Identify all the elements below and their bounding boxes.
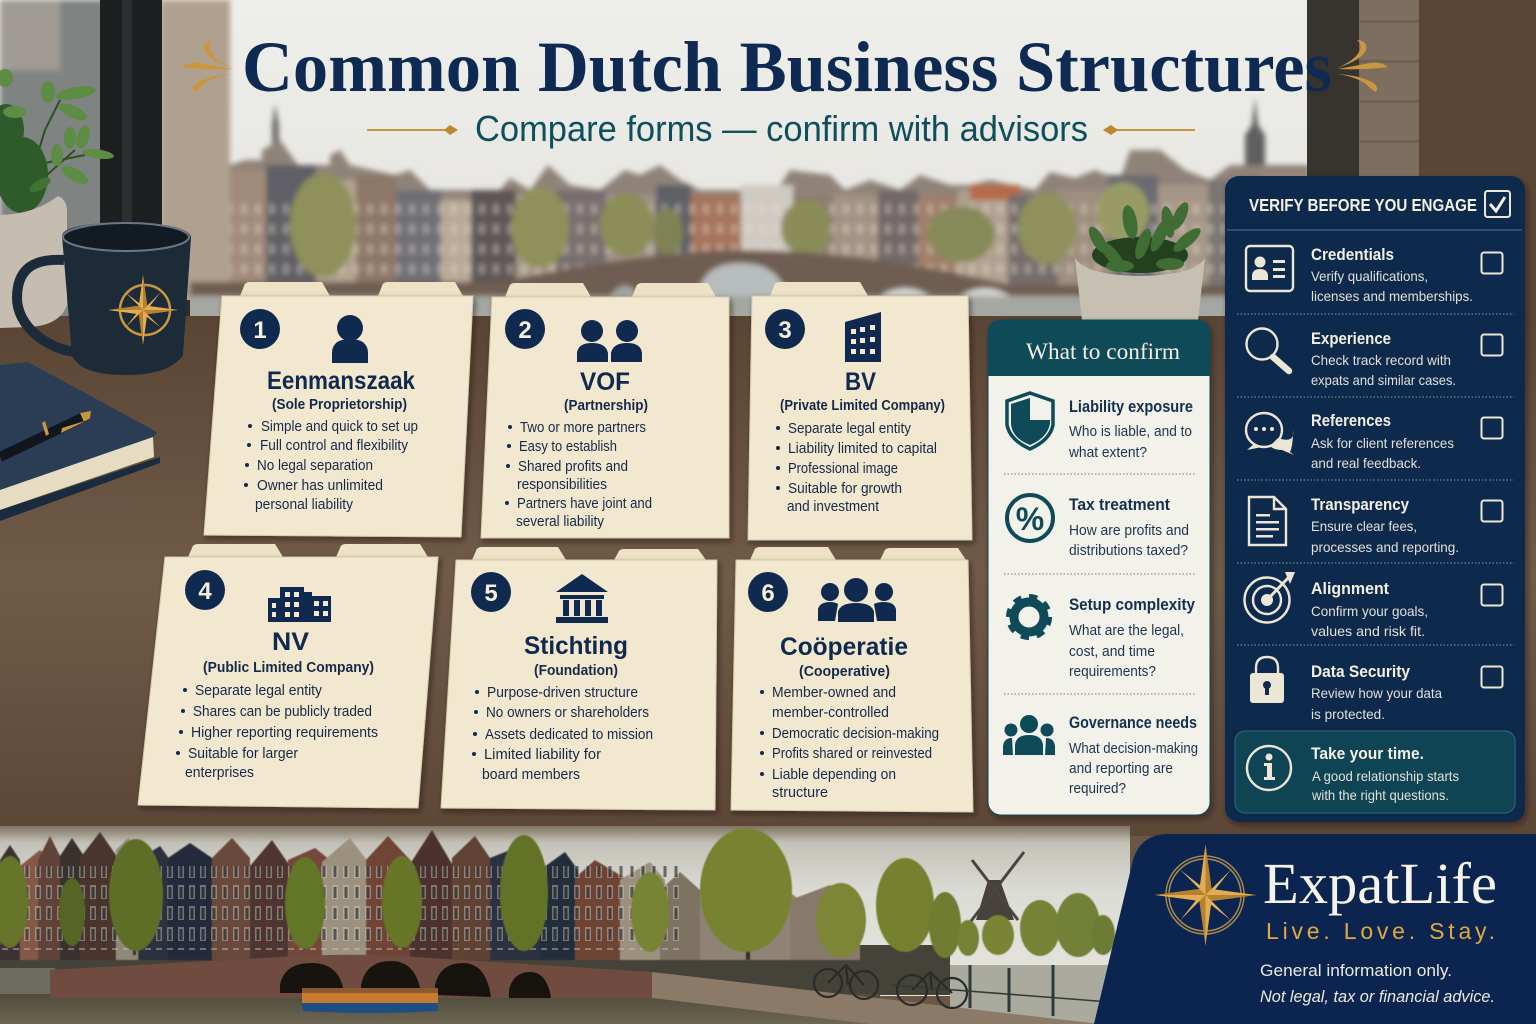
- card 2: VOF: (Partnership): [564, 398, 648, 414]
- railing: [890, 965, 1110, 1016]
- number badge: 5: [484, 580, 498, 607]
- number badge: 1: [253, 317, 267, 344]
- bicycles: [814, 965, 967, 1008]
- number badge: [471, 572, 511, 612]
- card 2: VOF: [481, 283, 729, 538]
- card 4: NV: [138, 544, 438, 808]
- card 2: VOF: Partners have joint and: [517, 496, 652, 512]
- card 4: NV: enterprises: [185, 765, 254, 781]
- item: credentials: Credentials: [1311, 245, 1394, 264]
- windmill: [968, 852, 1024, 925]
- item: tax treatment: distributions taxed?: [1069, 543, 1188, 559]
- number badge: [765, 309, 805, 349]
- card 6: Coöperatie: Profits shared or reinvested: [772, 746, 932, 762]
- card 2: VOF: Easy to establish: [519, 439, 617, 455]
- panel: what to confirm: [988, 320, 1210, 815]
- card 2: VOF: Shared profits and: [518, 459, 628, 475]
- card 6: Coöperatie: [731, 547, 973, 812]
- item: alignment: [1244, 572, 1502, 639]
- card 6: Coöperatie: Member-owned and: [772, 685, 896, 701]
- item: alignment: Alignment: [1311, 579, 1389, 598]
- number badge: [185, 570, 225, 610]
- photo: plant in pot: [0, 69, 114, 328]
- card 2: VOF: responsibilities: [517, 477, 607, 493]
- panel heading with check box: VERIFY BEFORE YOU ENGAGE: [1249, 195, 1477, 215]
- icon: compass rose: [1155, 844, 1256, 946]
- number badge: 4: [198, 578, 212, 605]
- item: transparency: Ensure clear fees,: [1311, 518, 1417, 534]
- background: wooden table: [0, 316, 1536, 836]
- card 1: Eenmanszaak: personal liability: [255, 497, 354, 513]
- item: setup complexity: Setup complexity: [1069, 596, 1196, 614]
- item: governance needs: required?: [1069, 781, 1126, 797]
- icon: institution: [556, 574, 608, 623]
- card 6: Coöperatie: Democratic decision-making: [772, 726, 939, 742]
- card 3: BV: Suitable for growth: [788, 481, 902, 497]
- icon: person: [332, 315, 368, 363]
- background: bottom canal scene: [0, 826, 1130, 1024]
- card 6: Coöperatie: member-controlled: [772, 705, 889, 721]
- card 6: Coöperatie: (Cooperative): [799, 664, 890, 680]
- card 3: BV: Professional image: [788, 461, 898, 477]
- card 3: BV: and investment: [787, 499, 879, 515]
- card 4: NV: NV: [272, 628, 309, 656]
- boat: [301, 988, 438, 1013]
- item: data security: [1250, 657, 1502, 722]
- card 1: Eenmanszaak: Full control and flexibility: [260, 438, 409, 454]
- number badge: 6: [761, 580, 775, 607]
- callout: take your time: A good relationship starts: [1312, 768, 1459, 784]
- card 4: NV: Shares can be publicly traded: [193, 704, 372, 720]
- card 4: NV: (Public Limited Company): [203, 660, 374, 676]
- icon: two people: [577, 320, 642, 362]
- item: references: References: [1311, 411, 1391, 430]
- card 1: Eenmanszaak: (Sole Proprietorship): [272, 397, 407, 413]
- number badge: 3: [778, 317, 792, 344]
- card 4: NV: Separate legal entity: [195, 683, 323, 699]
- card 1: Eenmanszaak: Simple and quick to set up: [261, 419, 418, 435]
- item: credentials: [1246, 245, 1502, 304]
- number badge: 2: [518, 317, 532, 344]
- logo panel: ExpatLife: [1094, 834, 1536, 1024]
- number badge: [240, 309, 280, 349]
- panel: verify before you engage: [1225, 176, 1525, 822]
- logo panel: ExpatLife: ExpatLife: [1263, 851, 1497, 916]
- card 3: BV: Liability limited to capital: [788, 441, 937, 457]
- item: references: [1246, 411, 1502, 471]
- bridge: [0, 955, 1100, 1024]
- item: alignment: Confirm your goals,: [1311, 603, 1428, 619]
- card 6: Coöperatie: structure: [772, 785, 828, 801]
- item: setup complexity: What are the legal,: [1069, 623, 1184, 639]
- callout: take your time: [1235, 731, 1515, 813]
- card 1: Eenmanszaak: No legal separation: [257, 458, 373, 474]
- card 4: NV: Higher reporting requirements: [191, 725, 378, 741]
- card 5: Stichting: Assets dedicated to mission: [485, 727, 653, 743]
- card 5: Stichting: Stichting: [524, 632, 628, 660]
- icon: group of people: [818, 578, 896, 622]
- item: experience: Check track record with: [1311, 352, 1451, 368]
- item: setup complexity: [1009, 596, 1196, 680]
- photo: mug with compass: [17, 222, 191, 375]
- card 2: VOF: Two or more partners: [520, 420, 646, 436]
- item: references: and real feedback.: [1311, 455, 1421, 471]
- photo: small plant on the desk: [1075, 200, 1205, 320]
- item: experience: Experience: [1311, 329, 1391, 348]
- card 5: Stichting: Purpose-driven structure: [487, 685, 638, 701]
- card 3: BV: BV: [845, 368, 876, 396]
- card 5: Stichting: Limited liability for: [484, 747, 601, 763]
- card 1: Eenmanszaak: [204, 282, 473, 537]
- card 6: Coöperatie: Liable depending on: [772, 767, 896, 783]
- item: credentials: licenses and memberships.: [1311, 288, 1473, 304]
- item: governance needs: and reporting are: [1069, 761, 1173, 777]
- item: experience: [1246, 328, 1502, 388]
- icon: office building: [845, 312, 881, 362]
- card 2: VOF: several liability: [516, 514, 605, 530]
- logo panel: ExpatLife: Live. Love. Stay.: [1266, 918, 1498, 944]
- subtitle with arrows: Compare forms — confirm with advisors: [475, 108, 1088, 149]
- item: governance needs: What decision-making: [1069, 741, 1198, 757]
- item: transparency: Transparency: [1311, 495, 1409, 514]
- item: setup complexity: requirements?: [1069, 664, 1156, 680]
- item: governance needs: Governance needs: [1069, 714, 1197, 732]
- card 4: NV: Suitable for larger: [188, 746, 298, 762]
- background: window view with blurred skyline: [0, 0, 1536, 330]
- panel heading: What to confirm: [1026, 339, 1180, 364]
- item: liability exposure: what extent?: [1068, 445, 1147, 461]
- card 1: Eenmanszaak: Owner has unlimited: [257, 478, 383, 494]
- item: governance needs: [1003, 714, 1198, 797]
- item: liability exposure: [1007, 393, 1193, 461]
- card 5: Stichting: (Foundation): [534, 663, 618, 679]
- item: tax treatment: %: [1016, 501, 1044, 537]
- item: tax treatment: How are profits and: [1069, 523, 1189, 539]
- card 1: Eenmanszaak: Eenmanszaak: [267, 367, 415, 395]
- item: alignment: values and risk fit.: [1311, 623, 1425, 639]
- item: tax treatment: [1007, 495, 1189, 559]
- photo: notebook and pen: [0, 362, 160, 521]
- number badge: [505, 309, 545, 349]
- item: transparency: processes and reporting.: [1311, 539, 1459, 555]
- item: data security: Review how your data: [1311, 685, 1442, 701]
- logo panel: ExpatLife: Not legal, tax or financial advice.: [1260, 987, 1495, 1006]
- number badge: [748, 572, 788, 612]
- item: tax treatment: Tax treatment: [1069, 496, 1170, 514]
- icon: city buildings: [268, 587, 331, 622]
- card 5: Stichting: [441, 547, 717, 810]
- item: transparency: [1249, 495, 1502, 555]
- title text: Common Dutch Business Structures: [242, 27, 1332, 107]
- item: data security: is protected.: [1311, 706, 1385, 722]
- callout: take your time: with the right questions.: [1311, 787, 1449, 803]
- logo panel: ExpatLife: General information only.: [1260, 961, 1452, 980]
- item: experience: expats and similar cases.: [1311, 372, 1456, 388]
- callout: take your time: Take your time.: [1311, 744, 1424, 763]
- item: credentials: Verify qualifications,: [1311, 268, 1428, 284]
- item: liability exposure: Liability exposure: [1069, 398, 1193, 416]
- card 3: BV: (Private Limited Company): [780, 398, 945, 414]
- card 2: VOF: VOF: [580, 368, 630, 396]
- title with flourishes: [182, 27, 1388, 107]
- item: references: Ask for client references: [1311, 435, 1454, 451]
- item: liability exposure: Who is liable, and to: [1069, 424, 1192, 440]
- card 5: Stichting: board members: [482, 767, 580, 783]
- card 5: Stichting: No owners or shareholders: [486, 705, 649, 721]
- card 6: Coöperatie: Coöperatie: [780, 633, 908, 661]
- item: data security: Data Security: [1311, 662, 1410, 681]
- card 3: BV: Separate legal entity: [788, 421, 912, 437]
- card 3: BV: [748, 282, 972, 540]
- item: setup complexity: cost, and time: [1069, 644, 1155, 660]
